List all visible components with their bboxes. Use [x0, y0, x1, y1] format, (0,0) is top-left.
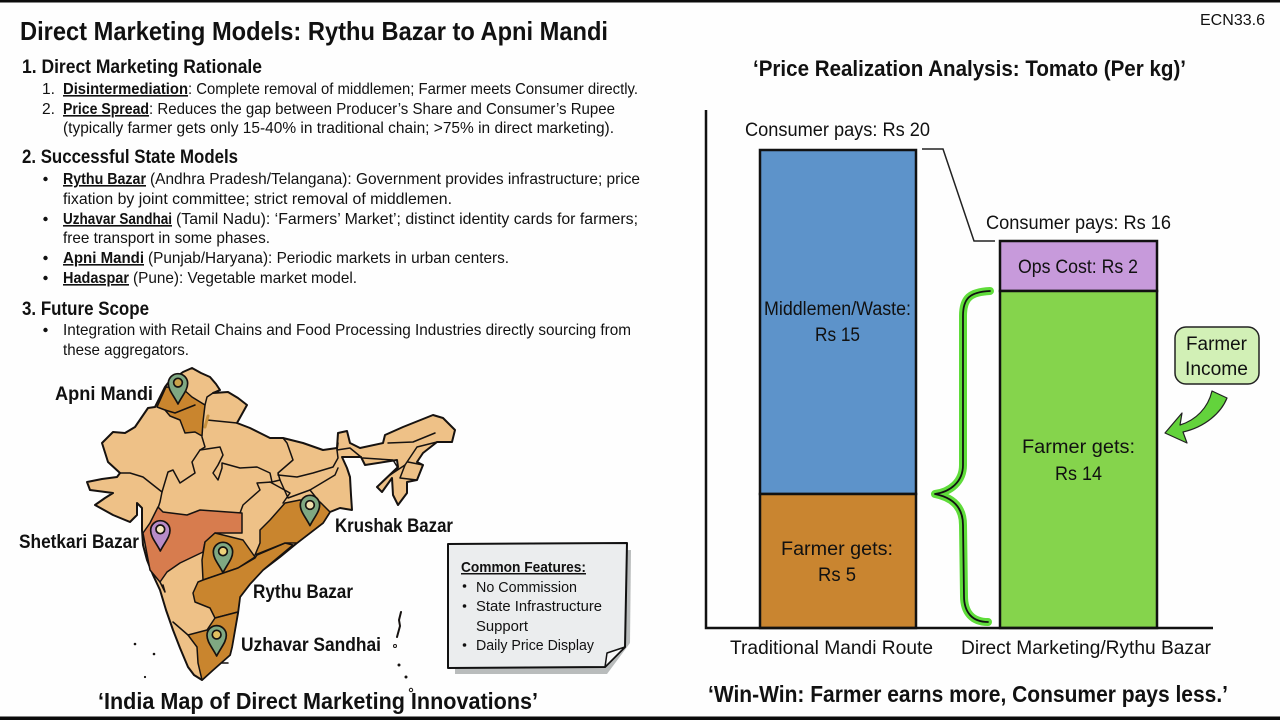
callout: common features note: Daily Price Display [476, 637, 594, 654]
segment: farmer income: Rs 14 [1055, 464, 1102, 485]
callout: farmer income: Farmer [1186, 334, 1248, 355]
callout: common features note: Support [476, 618, 529, 635]
callout: common features note: State Infrastructure [476, 598, 602, 615]
list: state models: Apni Mandi [63, 250, 144, 267]
list: rationale points: : Complete removal of middlemen; Farmer meets Consumer directly. [188, 81, 638, 98]
callout: common features note: No Commission [476, 579, 577, 596]
bar chart: price realization [706, 110, 1213, 659]
list: state models: (Pune): Vegetable market model. [133, 270, 357, 287]
map label: Krushak Bazar: Krushak Bazar [335, 516, 454, 537]
list: future scope [43, 322, 631, 359]
map: India with marked states [87, 368, 455, 692]
state: Telangana [202, 533, 255, 580]
callout: common features note [448, 543, 631, 674]
segment: farmer income: Farmer gets: [1022, 437, 1135, 458]
list: state models: Rythu Bazar [63, 171, 146, 188]
state: Punjab and Haryana [157, 387, 205, 436]
list: rationale points: Price Spread [63, 101, 149, 118]
map base outline [87, 368, 455, 680]
list: rationale points: : Reduces the gap between Producer’s Share and Consumer’s Rupee [149, 101, 615, 118]
segment: operations cost: Ops Cost: Rs 2 [1018, 257, 1138, 278]
bar: direct marketing [1000, 241, 1157, 628]
arrow: to farmer income [1165, 391, 1227, 443]
map label: Apni Mandi: Apni Mandi [55, 384, 153, 405]
segment: middlemen and waste: Middlemen/Waste: [764, 299, 911, 320]
list: state models: fixation by joint committee; strict removal of middlemen. [63, 191, 452, 208]
Delhi-area smudge [205, 416, 208, 427]
list: state models: (Tamil Nadu): ‘Farmers’ Market’; distinct identity cards for farmers; [176, 211, 638, 228]
pin: Uzhavar Sandhai [207, 626, 226, 656]
coast nib [222, 662, 228, 664]
map label: Uzhavar Sandhai: Uzhavar Sandhai [241, 635, 381, 656]
panel: text outline [22, 57, 640, 359]
heading: rationale: 1. Direct Marketing Rationale [22, 57, 262, 78]
brace: farmer income span [935, 291, 990, 622]
axis label: direct: Direct Marketing/Rythu Bazar [961, 638, 1212, 659]
map label: Shetkari Bazar: Shetkari Bazar [19, 532, 140, 553]
segment: operations cost [1000, 241, 1157, 291]
segment: farmer share: Rs 5 [818, 565, 856, 586]
list: rationale points [42, 81, 638, 137]
course code: ECN33.6 [1200, 12, 1265, 29]
state: Odisha [255, 500, 330, 555]
callout: farmer income: Income [1185, 359, 1248, 380]
pin: Apni Mandi [168, 374, 188, 404]
list: rationale points: 1. [42, 81, 55, 98]
list: rationale points: 2. [42, 101, 55, 118]
state: Tamil Nadu [188, 612, 238, 680]
chart title: ‘Price Realization Analysis: Tomato (Per kg)’ [753, 56, 1186, 81]
pin: Shetkari Bazar [151, 521, 170, 551]
bar: traditional mandi route [760, 150, 916, 628]
state: Maharashtra [143, 507, 242, 582]
label: consumer pays 16: Consumer pays: Rs 16 [986, 213, 1171, 234]
list: future scope: Integration with Retail Chains and Food Processing Industries directly sourcing from [63, 322, 631, 339]
list: state models: Hadaspar [63, 270, 129, 287]
callout: common features note: Common Features: [461, 559, 586, 576]
segment: middlemen and waste: Rs 15 [815, 325, 860, 346]
segment: farmer income [1000, 291, 1157, 628]
segment: middlemen and waste [760, 150, 916, 494]
axis label: traditional: Traditional Mandi Route [730, 638, 933, 659]
callout: farmer income [1175, 327, 1259, 384]
list: future scope: these aggregators. [63, 342, 189, 359]
segment: farmer share: Farmer gets: [781, 539, 893, 560]
list: state models: Uzhavar Sandhai [63, 211, 172, 228]
label: consumer pays 20: Consumer pays: Rs 20 [745, 120, 930, 141]
pin: Rythu Bazar [213, 542, 233, 573]
state: Punjab border [165, 405, 195, 413]
pin: Krushak Bazar [300, 495, 320, 526]
map caption: ‘India Map of Direct Marketing Innovations’ [98, 688, 538, 714]
list: state models [43, 171, 640, 287]
title: Direct Marketing Models: Rythu Bazar to Apni Mandi [20, 16, 608, 46]
heading: future scope: 3. Future Scope [22, 299, 149, 320]
segment: farmer share [760, 494, 916, 628]
takeaway caption: ‘Win-Win: Farmer earns more, Consumer pays less.’ [708, 681, 1228, 707]
islands [134, 612, 413, 692]
list: state models: (Punjab/Haryana): Periodic markets in urban centers. [148, 250, 509, 267]
chart axes [706, 110, 1213, 628]
connector between bar tops [922, 149, 995, 241]
state: Andhra Pradesh [193, 543, 293, 618]
list: state models: free transport in some phases. [63, 230, 270, 247]
list: state models: (Andhra Pradesh/Telangana): Government provides infrastructure; price [150, 171, 640, 188]
list: rationale points: (typically farmer gets only 15-40% in traditional chain; >75% in direct marketing). [63, 120, 614, 137]
heading: state models: 2. Successful State Models [22, 147, 238, 168]
map label: Rythu Bazar: Rythu Bazar [253, 582, 354, 603]
state borders [120, 393, 437, 635]
list: rationale points: Disintermediation [63, 81, 188, 98]
